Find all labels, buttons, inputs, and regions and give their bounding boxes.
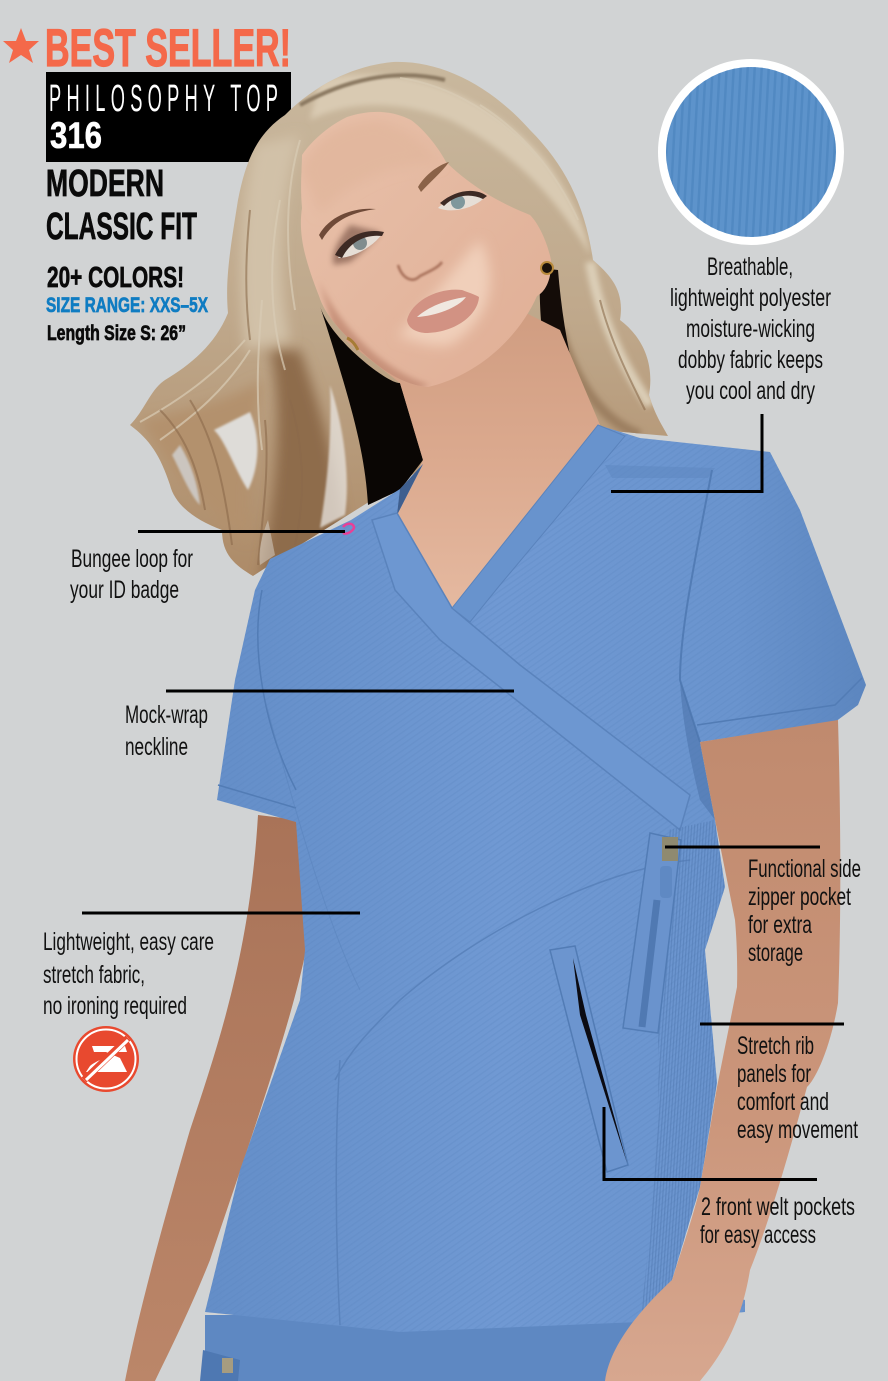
callout: bungee loop	[70, 545, 193, 604]
bungee loop	[343, 524, 354, 534]
fit heading: MODERN	[46, 163, 164, 205]
callout: zipper pocket: storage	[748, 939, 803, 967]
callout: welt pockets	[700, 1193, 855, 1249]
dark underside	[320, 306, 423, 505]
eye right	[438, 195, 485, 210]
fit heading: CLASSIC FIT	[46, 206, 197, 248]
callout: fabric: moisture-wicking	[686, 315, 815, 343]
callout: stretch fabric: stretch fabric,	[43, 961, 145, 989]
shirt	[205, 425, 866, 1332]
callout: zipper pocket: for extra	[748, 911, 812, 939]
nose	[398, 262, 442, 280]
icon: star	[3, 28, 39, 63]
callout: stretch fabric: Lightweight, easy care	[43, 928, 214, 956]
callout: stretch fabric: no ironing required	[43, 992, 187, 1020]
left arm	[125, 815, 306, 1381]
earrings	[347, 262, 553, 350]
specs text block: 20+ COLORS!	[47, 262, 184, 294]
callout: rib panels: Stretch rib	[737, 1032, 814, 1060]
callout: zipper pocket	[748, 855, 861, 967]
callout: fabric: dobby fabric keeps	[678, 346, 823, 374]
callout: rib panels: panels for	[737, 1060, 811, 1088]
zipper pocket	[623, 833, 681, 1033]
leader line: neckline	[166, 690, 514, 692]
heading: best seller	[3, 19, 291, 78]
callout: neckline: neckline	[125, 733, 188, 761]
callout: neckline: Mock-wrap	[125, 701, 208, 729]
specs text block: Length Size S: 26”	[47, 322, 186, 345]
rib side panel	[640, 820, 725, 1322]
icon: no ironing	[73, 1026, 139, 1092]
callout: welt pockets: for easy access	[700, 1221, 816, 1249]
body seams	[335, 860, 690, 1080]
welt pocket	[550, 946, 628, 1172]
callout: rib panels: comfort and	[737, 1088, 829, 1116]
leader line: welt pockets	[604, 1107, 817, 1180]
leader line: stretch fabric	[82, 912, 360, 914]
fabric swatch circle	[658, 59, 844, 245]
face	[300, 112, 551, 395]
specs text block	[46, 262, 208, 345]
zipper pull	[662, 837, 678, 861]
eyebrows	[319, 209, 376, 240]
callout: stretch fabric	[43, 928, 214, 1020]
pants	[205, 1315, 645, 1381]
wrap collar band	[372, 513, 690, 830]
product name: PHILOSOPHY TOP	[49, 78, 278, 120]
best seller text: BEST SELLER!	[45, 19, 291, 78]
callout: fabric: you cool and dry	[686, 377, 815, 405]
hair	[130, 62, 668, 580]
lips	[407, 290, 479, 333]
callout: neckline	[125, 701, 208, 761]
product title box	[46, 72, 291, 162]
neck and chest	[345, 300, 600, 610]
style number: 316	[50, 115, 102, 156]
right arm	[605, 720, 840, 1381]
leader line: zipper pocket	[665, 846, 820, 848]
underarm shadow	[680, 680, 715, 820]
callout: rib panels	[737, 1032, 858, 1144]
leader line: rib panels	[700, 1022, 844, 1026]
sleeve seams	[680, 470, 712, 742]
fit heading	[46, 163, 197, 248]
leader line: bungee loop	[138, 530, 345, 533]
callout: fabric: Breathable,	[707, 253, 793, 281]
callout: bungee loop: Bungee loop for	[71, 545, 193, 573]
callout: fabric	[670, 253, 831, 405]
specs text block: SIZE RANGE: XXS–5X	[46, 294, 208, 317]
shoulder yoke	[605, 465, 715, 478]
model photo illustration	[125, 62, 866, 1381]
leader line: fabric	[611, 414, 762, 492]
gaps in hair	[214, 412, 257, 490]
callout: bungee loop: your ID badge	[70, 576, 179, 604]
inner collar shadow	[397, 464, 423, 515]
eye left	[338, 234, 382, 258]
